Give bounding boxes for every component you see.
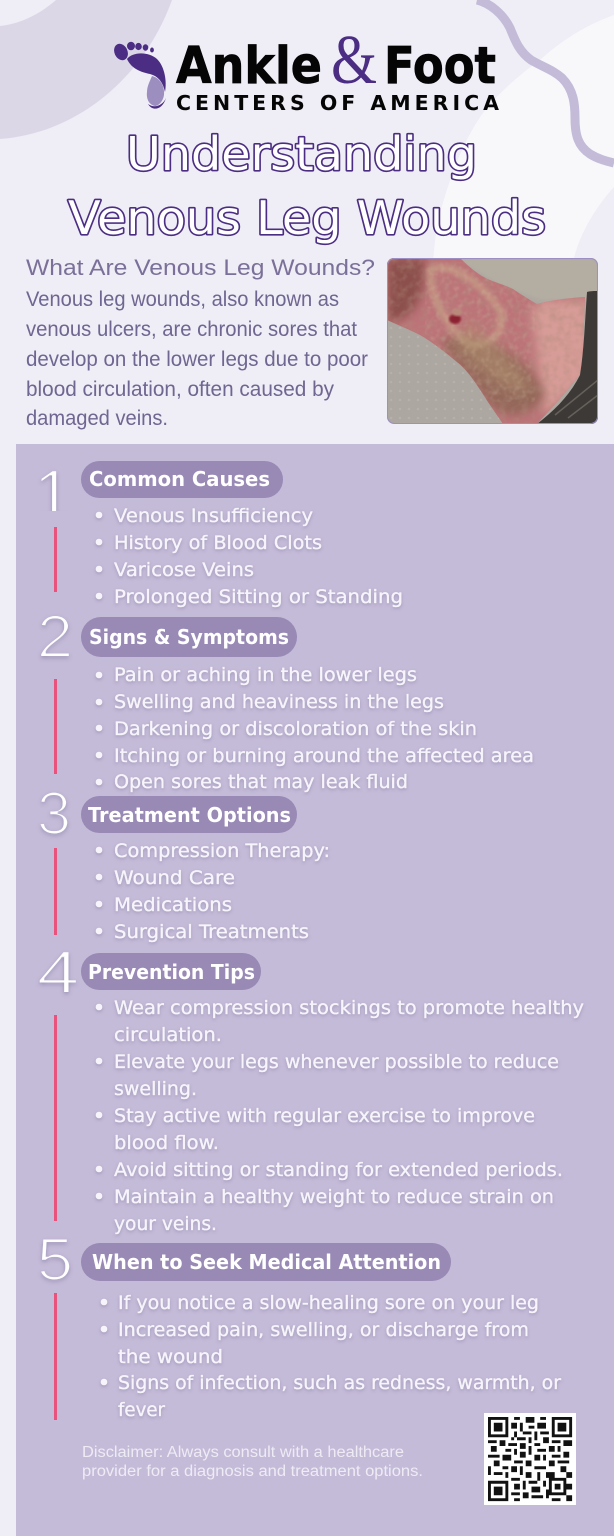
QR code bbox=[484, 1413, 576, 1505]
list: symptoms: Pain or aching in the lower legs bbox=[114, 664, 417, 686]
section 5: when to seek medical attention bbox=[37, 1226, 561, 1421]
intro text: blood circulation, often caused by bbox=[26, 378, 334, 401]
intro text: venous ulcers, are chronic sores that bbox=[26, 318, 357, 341]
number 3: 3 bbox=[37, 780, 71, 847]
timeline bar 5 bbox=[54, 1293, 57, 1420]
list: warning signs bbox=[101, 1292, 561, 1421]
timeline bar 3 bbox=[54, 848, 57, 935]
logo wordmark bbox=[176, 22, 499, 115]
heading pill: prevention tips bbox=[81, 953, 261, 990]
list: prevention: circulation. bbox=[114, 1024, 222, 1046]
section 3: treatment options bbox=[37, 780, 330, 943]
heading pill: signs and symptoms: Signs & Symptoms bbox=[89, 625, 289, 649]
section 2: signs and symptoms bbox=[37, 603, 534, 793]
heading pill: treatment options bbox=[81, 796, 297, 833]
heading pill: common causes: Common Causes bbox=[89, 467, 270, 491]
section 1: common causes bbox=[34, 456, 403, 608]
list: causes: History of Blood Clots bbox=[114, 532, 322, 554]
timeline bar 1 bbox=[54, 527, 57, 592]
title: Venous Leg Wounds bbox=[68, 191, 546, 245]
heading pill: treatment options: Treatment Options bbox=[88, 803, 291, 827]
list: symptoms: Swelling and heaviness in the legs bbox=[114, 691, 444, 713]
list: prevention bbox=[96, 997, 584, 1235]
number 5: 5 bbox=[37, 1226, 73, 1293]
list: treatments: Wound Care bbox=[114, 867, 235, 889]
logo wordmark: CENTERS OF AMERICA bbox=[176, 91, 499, 115]
logo wordmark: & bbox=[331, 22, 377, 99]
heading pill: when to seek medical attention bbox=[81, 1243, 451, 1281]
list: warning signs: Increased pain, swelling, or discharge from bbox=[118, 1319, 529, 1341]
list: causes: Venous Insufficiency bbox=[114, 505, 313, 527]
logo wordmark: Ankle bbox=[176, 37, 322, 96]
disclaimer bbox=[82, 1444, 423, 1480]
list: symptoms: Darkening or discoloration of the skin bbox=[114, 718, 477, 740]
list: treatments: Surgical Treatments bbox=[114, 921, 309, 943]
list: prevention: your veins. bbox=[114, 1213, 217, 1235]
list: warning signs: fever bbox=[118, 1399, 165, 1421]
list: prevention: Stay active with regular exercise to improve bbox=[114, 1105, 535, 1127]
timeline bar 4 bbox=[54, 1015, 57, 1221]
list: prevention: Elevate your legs whenever possible to reduce bbox=[114, 1051, 559, 1073]
logo wordmark: Foot bbox=[384, 37, 496, 96]
list: warning signs: the wound bbox=[118, 1346, 223, 1368]
number 1: 1 bbox=[34, 456, 72, 532]
list: causes: Varicose Veins bbox=[114, 559, 254, 581]
intro text bbox=[26, 288, 368, 430]
intro heading: What Are Venous Leg Wounds? bbox=[26, 255, 375, 280]
disclaimer: provider for a diagnosis and treatment options. bbox=[82, 1463, 423, 1480]
heading pill: when to seek medical attention: When to Seek Medical Attention bbox=[92, 1250, 441, 1274]
intro text: Venous leg wounds, also known as bbox=[26, 288, 339, 311]
disclaimer: Disclaimer: Always consult with a healthcare bbox=[82, 1444, 404, 1461]
panel: main content bbox=[16, 444, 614, 1536]
intro text: damaged veins. bbox=[26, 407, 168, 430]
list: causes bbox=[96, 505, 403, 608]
list: symptoms: Open sores that may leak fluid bbox=[114, 771, 408, 793]
photo: leg wound bbox=[387, 258, 598, 424]
section 4: prevention tips bbox=[37, 939, 584, 1235]
list: warning signs: Signs of infection, such as redness, warmth, or bbox=[118, 1372, 561, 1394]
heading pill: prevention tips: Prevention Tips bbox=[88, 960, 255, 984]
list: symptoms: Itching or burning around the affected area bbox=[114, 745, 534, 767]
list: causes: Prolonged Sitting or Standing bbox=[114, 586, 403, 608]
icon: foot bbox=[112, 42, 166, 109]
number 2: 2 bbox=[37, 603, 73, 670]
list: prevention: blood flow. bbox=[114, 1132, 219, 1154]
list: treatments: Medications bbox=[114, 894, 232, 916]
list: warning signs: If you notice a slow-healing sore on your leg bbox=[118, 1292, 539, 1314]
number 4: 4 bbox=[37, 939, 79, 1006]
heading pill: signs and symptoms bbox=[81, 617, 297, 657]
title bbox=[68, 127, 546, 245]
list: symptoms bbox=[96, 664, 534, 793]
list: prevention: Maintain a healthy weight to reduce strain on bbox=[114, 1186, 554, 1208]
list: prevention: Avoid sitting or standing for extended periods. bbox=[114, 1159, 563, 1181]
list: treatments bbox=[96, 840, 330, 943]
title: Understanding bbox=[126, 127, 477, 181]
list: treatments: Compression Therapy: bbox=[114, 840, 330, 862]
heading pill: common causes bbox=[81, 461, 283, 498]
logo bbox=[112, 22, 499, 115]
timeline bar 2 bbox=[54, 679, 57, 774]
list: prevention: Wear compression stockings to promote healthy bbox=[114, 997, 584, 1019]
intro text: develop on the lower legs due to poor bbox=[26, 348, 368, 371]
list: prevention: swelling. bbox=[114, 1078, 197, 1100]
